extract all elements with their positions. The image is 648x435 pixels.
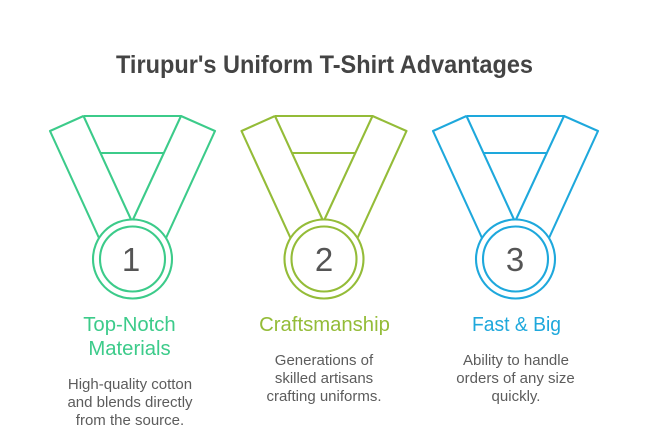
title: Tirupur's Uniform T-Shirt Advantages bbox=[116, 51, 533, 79]
panel: craftsmanship bbox=[242, 116, 406, 405]
description: fast and big: quickly. bbox=[492, 388, 540, 405]
description: materials: and blends directly bbox=[67, 394, 193, 411]
heading: fast and big: Fast & Big bbox=[472, 314, 561, 336]
description: materials: High-quality cotton bbox=[68, 376, 192, 393]
description: materials: from the source. bbox=[76, 412, 184, 429]
description: fast and big: Ability to handle bbox=[463, 352, 569, 369]
number 1: 1 bbox=[122, 241, 140, 278]
icon: medal 1 bbox=[50, 116, 215, 298]
panel: top-notch materials bbox=[50, 116, 215, 429]
description: craftsmanship: crafting uniforms. bbox=[266, 388, 382, 405]
description: craftsmanship: skilled artisans bbox=[275, 370, 373, 387]
number 2: 2 bbox=[315, 241, 333, 278]
description: fast and big: orders of any size bbox=[456, 370, 575, 387]
description: craftsmanship: Generations of bbox=[275, 352, 374, 369]
heading: top-notch materials: Materials bbox=[88, 338, 171, 360]
heading: craftsmanship: Craftsmanship bbox=[259, 314, 390, 336]
heading: top-notch materials: Top-Notch bbox=[83, 314, 176, 336]
number 3: 3 bbox=[506, 241, 524, 278]
icon: medal 2 bbox=[242, 116, 406, 298]
icon: medal 3 bbox=[433, 116, 598, 298]
panel: fast and big bbox=[433, 116, 598, 405]
